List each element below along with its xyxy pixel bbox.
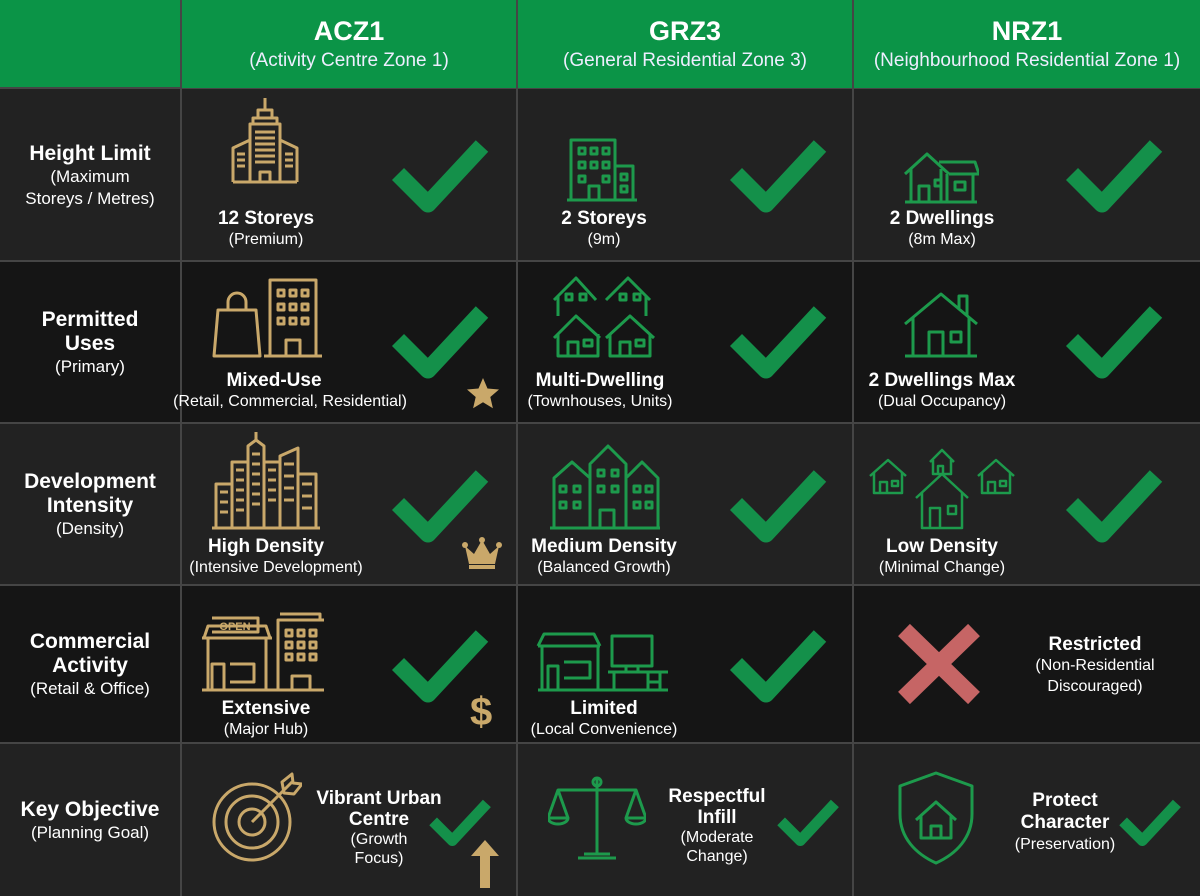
icon: single house: [904, 292, 978, 358]
caption: medium density: Medium Density: [531, 536, 677, 557]
caption: respectful infill: Respectful: [668, 786, 766, 807]
caption: low density: (Minimal Change): [879, 559, 1005, 576]
icon: shopping bag and building: [212, 278, 322, 358]
caption: protect character: (Preservation): [1015, 836, 1115, 853]
caption: 2 dwellings: (8m Max): [908, 231, 976, 248]
header: NRZ1: NRZ1: [992, 16, 1062, 46]
row label: permitted uses: (Primary): [55, 357, 125, 376]
caption: vibrant urban centre: Focus): [355, 850, 403, 867]
caption: limited: [531, 698, 677, 738]
header: ACZ1: [182, 0, 516, 88]
icon: medium density townhouses: [550, 444, 660, 530]
header: ACZ1: ACZ1: [314, 16, 384, 46]
icon: crown: [462, 537, 502, 569]
caption: vibrant urban centre: Centre: [349, 809, 409, 830]
caption: 2 dwellings max: (Dual Occupancy): [878, 393, 1006, 410]
caption: respectful infill: Change): [686, 848, 748, 865]
icon: small shop and desk: [536, 632, 668, 692]
row label: commercial activity: (Retail & Office): [30, 679, 150, 698]
caption: respectful infill: [668, 786, 766, 865]
caption: protect character: [1015, 790, 1115, 853]
caption: multi-dwelling: Multi-Dwelling: [536, 370, 664, 391]
header: NRZ1: (Neighbourhood Residential Zone 1): [874, 50, 1180, 71]
caption: multi-dwelling: (Townhouses, Units): [528, 393, 672, 410]
row label: development intensity: (Density): [56, 519, 124, 538]
caption: high density: High Density: [208, 536, 324, 557]
row label: height limit: Storeys / Metres): [25, 189, 155, 208]
row label: commercial activity: Commercial: [30, 630, 150, 653]
row label: permitted uses: Permitted: [42, 308, 138, 331]
caption: high density: [189, 536, 363, 576]
caption: vibrant urban centre: Vibrant Urban: [316, 788, 442, 809]
caption: 2 dwellings max: 2 Dwellings Max: [869, 370, 1015, 391]
row label: development intensity: Intensity: [47, 494, 133, 517]
caption: mixed-use: (Retail, Commercial, Residential): [173, 393, 407, 410]
icon: open shop and office: [202, 612, 324, 692]
row label: key objective: [21, 798, 159, 842]
caption: high density: (Intensive Development): [189, 559, 363, 576]
row label: height limit: Height Limit: [29, 142, 151, 165]
icon: shield house: [898, 772, 974, 864]
caption: 2 storeys: [561, 208, 647, 248]
icon: skyscraper: [232, 98, 298, 184]
header: GRZ3: (General Residential Zone 3): [563, 50, 807, 71]
row label: key objective: Key Objective: [21, 798, 159, 821]
caption: restricted: Restricted: [1049, 634, 1141, 655]
caption: 12 storeys: (Premium): [229, 231, 303, 248]
row label: commercial activity: Activity: [52, 654, 128, 677]
caption: protect character: Protect: [1032, 790, 1098, 811]
caption: limited: Limited: [570, 698, 638, 719]
caption: multi-dwelling: [528, 370, 672, 410]
row label: height limit: [25, 142, 155, 208]
caption: medium density: [531, 536, 677, 576]
icon: open shop and office: OPEN: [219, 621, 251, 633]
caption: 2 dwellings: 2 Dwellings: [890, 208, 994, 229]
icon: low building: [567, 138, 637, 202]
caption: 12 storeys: 12 Storeys: [218, 208, 314, 229]
caption: protect character: Character: [1021, 812, 1109, 833]
row label: development intensity: Development: [24, 470, 156, 493]
caption: extensive: (Major Hub): [224, 721, 308, 738]
caption: respectful infill: (Moderate: [681, 829, 753, 846]
caption: mixed-use: Mixed-Use: [226, 370, 322, 391]
caption: restricted: (Non-Residential: [1035, 657, 1155, 674]
caption: medium density: (Balanced Growth): [537, 559, 671, 576]
row label: development intensity: [24, 470, 156, 538]
header: NRZ1: [854, 0, 1200, 88]
icon: dense city: [212, 432, 320, 530]
row label: permitted uses: Uses: [65, 332, 115, 355]
caption: restricted: [1035, 634, 1155, 695]
icon: townhouses: [553, 276, 655, 358]
caption: restricted: Discouraged): [1047, 678, 1143, 695]
icon: red cross: [898, 624, 980, 704]
caption: vibrant urban centre: (Growth: [351, 831, 407, 848]
caption: 2 storeys: 2 Storeys: [561, 208, 647, 229]
caption: 2 dwellings max: [869, 370, 1016, 410]
icon: target: [212, 772, 302, 862]
icon: house: [904, 152, 979, 204]
caption: vibrant urban centre: [316, 788, 442, 867]
caption: mixed-use: [173, 370, 407, 410]
caption: 2 storeys: (9m): [588, 231, 620, 248]
row label: permitted uses: [42, 308, 138, 376]
icon: scattered houses: [869, 448, 1015, 530]
caption: low density: [879, 536, 1005, 576]
caption: extensive: Extensive: [222, 698, 310, 719]
caption: low density: Low Density: [886, 536, 998, 557]
icon: dollar: $: [470, 690, 492, 734]
header: GRZ3: [518, 0, 852, 88]
caption: 12 storeys: [218, 208, 314, 248]
caption: limited: (Local Convenience): [531, 721, 677, 738]
icon: star: [467, 378, 499, 408]
caption: 2 dwellings: [890, 208, 994, 248]
caption: respectful infill: Infill: [697, 807, 737, 828]
caption: extensive: [222, 698, 310, 738]
icon: scales: [548, 776, 646, 860]
row label: height limit: (Maximum: [50, 167, 130, 186]
header: ACZ1: (Activity Centre Zone 1): [249, 50, 449, 71]
row label: key objective: (Planning Goal): [31, 823, 149, 842]
icon: up arrow: [471, 840, 499, 888]
row label: commercial activity: [30, 630, 150, 698]
header: GRZ3: GRZ3: [649, 16, 721, 46]
